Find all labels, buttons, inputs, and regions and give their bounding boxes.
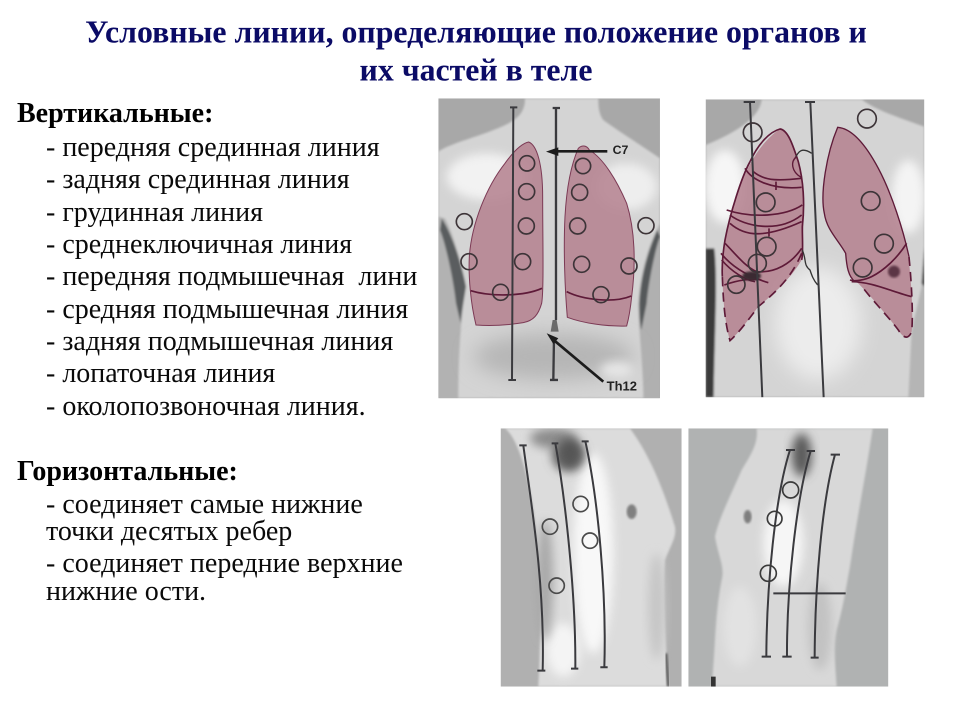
list of horizontal lines — [46, 489, 403, 607]
heading: vertical: Вертикальные: — [17, 98, 213, 129]
title — [85, 14, 867, 88]
auscultation circles — [456, 156, 654, 303]
photo: left side of torso — [688, 428, 888, 687]
title: Условные линии, определяющие положение органов и — [85, 14, 867, 50]
list of vertical lines: - задняя срединная линия — [46, 164, 350, 195]
lower lung borders right — [850, 243, 907, 281]
guide lines — [762, 450, 846, 658]
lower lung borders — [471, 288, 542, 295]
photo: front with lungs — [705, 99, 925, 397]
right lung — [564, 146, 634, 326]
circles — [760, 482, 799, 581]
title: их частей в теле — [360, 52, 592, 88]
list of vertical lines — [46, 132, 417, 422]
list of horizontal lines: нижние ости. — [46, 576, 206, 607]
auscultation circles — [728, 109, 893, 293]
list of horizontal lines: - соединяет самые нижние — [46, 489, 363, 520]
list of horizontal lines: точки десятых ребер — [46, 516, 292, 547]
photo: right side of torso — [501, 428, 682, 687]
list of vertical lines: - грудинная линия — [46, 197, 263, 228]
photo: back with lungs — [438, 98, 660, 398]
list of vertical lines: - задняя подмышечная линия — [46, 326, 393, 357]
guide lines — [519, 441, 608, 671]
list of vertical lines: - лопаточная линия — [46, 358, 275, 389]
list of vertical lines: - околопозвоночная линия. — [46, 391, 366, 422]
dashed lower border left — [722, 253, 802, 341]
list of vertical lines: - средняя подмышечная линия — [46, 294, 408, 325]
heart border wavy line — [795, 150, 818, 285]
C7 arrow and label — [546, 146, 628, 156]
heading: horizontal: Горизонтальные: — [17, 456, 238, 487]
list of vertical lines: - передняя подмышечная лини — [46, 261, 417, 292]
text block: vertical lines — [17, 98, 417, 422]
right-side lung of image left — [722, 129, 804, 341]
list of vertical lines: - передняя срединная линия — [46, 132, 380, 163]
vertical lines — [744, 102, 762, 397]
left lung — [469, 142, 543, 325]
C7 arrow and label: C7 — [613, 143, 629, 157]
left lung of image right — [823, 127, 912, 337]
dark lobes outline on left lung — [721, 129, 804, 285]
Th12 arrow and label — [547, 333, 637, 394]
text block: horizontal lines — [17, 456, 403, 607]
circles — [542, 496, 598, 593]
list of horizontal lines: - соединяет передние верхние — [46, 548, 403, 579]
Th12 arrow and label: Th12 — [607, 379, 637, 394]
list of vertical lines: - среднеключичная линия — [46, 229, 352, 260]
vertical lines — [508, 107, 517, 380]
